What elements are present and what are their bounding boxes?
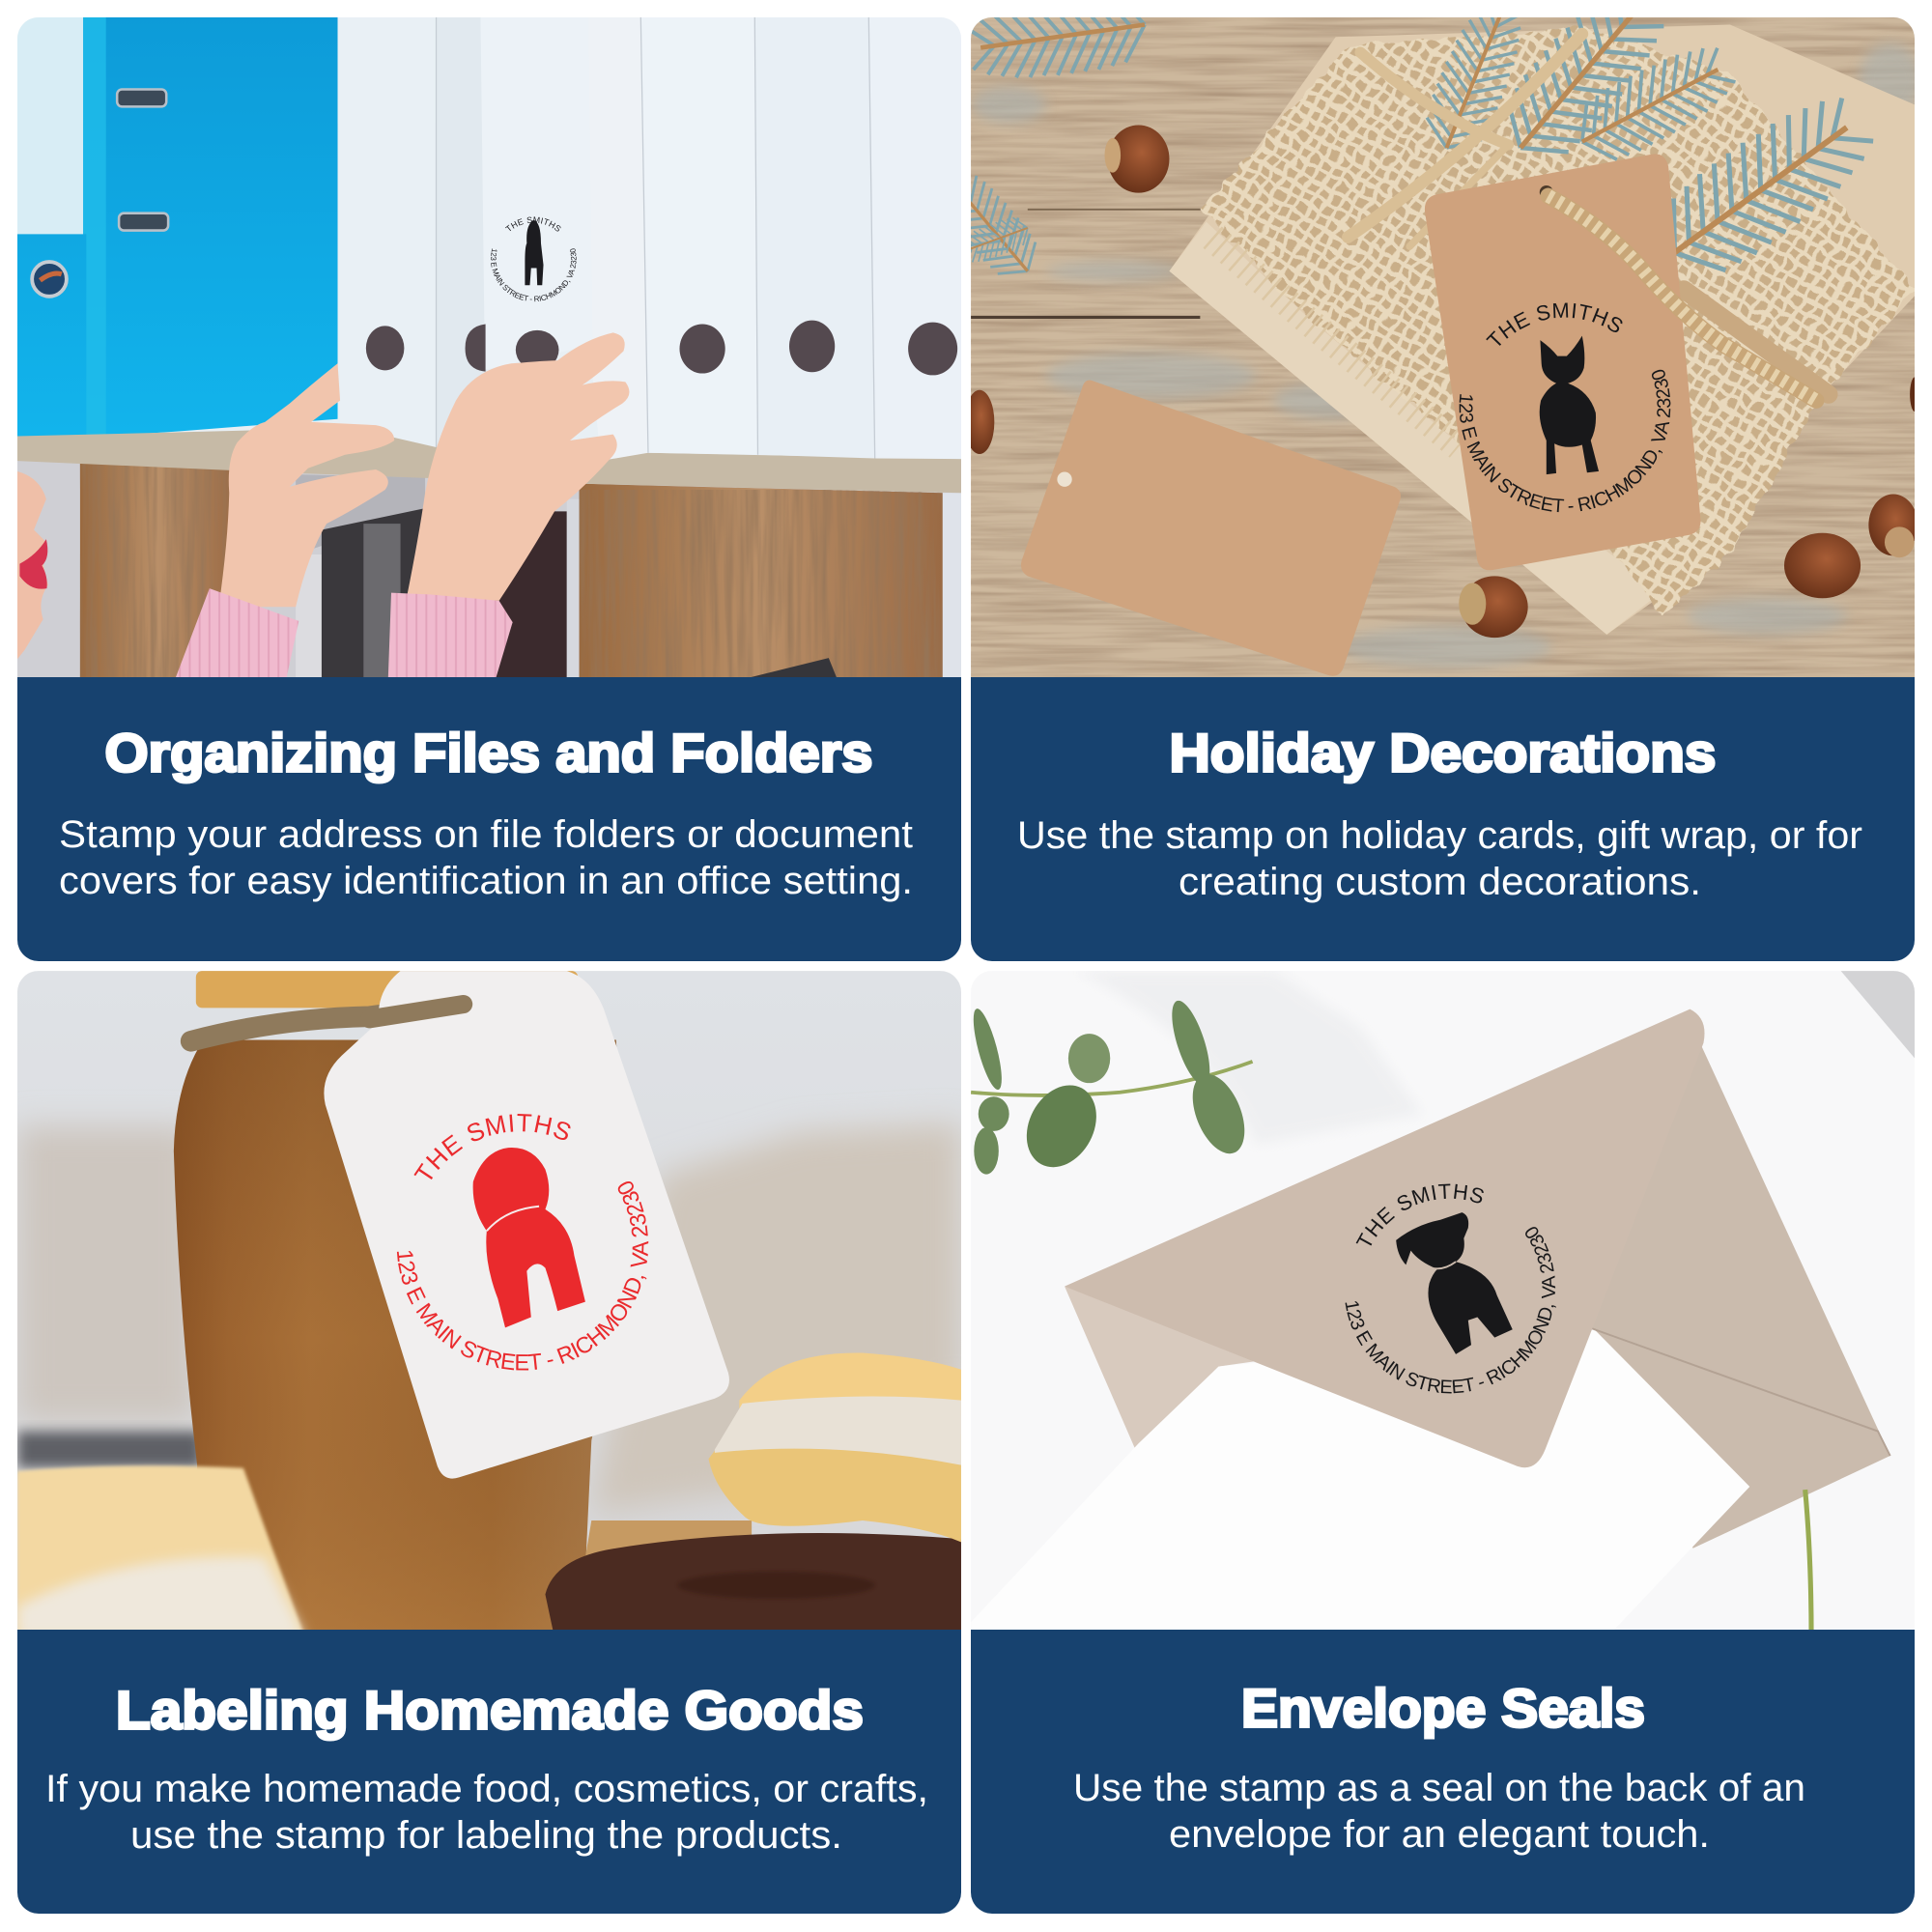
body text: creating custom decorations.: [1179, 861, 1701, 903]
cookie: right: [708, 1352, 961, 1542]
body text: envelope for an elegant touch.: [1169, 1813, 1710, 1856]
blurred cloth: [17, 1123, 961, 1515]
panel: labeling homemade goods: [17, 971, 961, 1914]
stamp: the smiths (hound): 123 E MAIN STREET - RICHMOND, VA 23230: [491, 248, 577, 301]
stamp: the smiths (french bulldog): [1459, 303, 1671, 512]
hazelnuts: [965, 125, 1919, 638]
white sheet: [971, 1329, 1749, 1637]
caption band: [17, 1630, 961, 1914]
chocolate cookie: [545, 1520, 961, 1637]
cookie: left: [17, 1465, 305, 1637]
heading: Envelope Seals: [1241, 1677, 1645, 1739]
envelope fold line: [1591, 1328, 1890, 1456]
fabric shadow: [1077, 971, 1422, 1145]
panel: envelope seals: [971, 971, 1915, 1914]
blank kraft tag: [1021, 380, 1401, 676]
stamp: the smiths (hound): THE SMITHS: [505, 216, 560, 232]
stamp: the smiths (hound): [491, 216, 577, 301]
photo: gift with kraft tags: [971, 17, 1915, 677]
jar: [174, 971, 629, 1637]
stamp: the smiths (bulldog): 123 E MAIN STREET - RICHMOND, VA 23230: [1345, 1227, 1556, 1393]
panel: organizing files and folders: [17, 17, 961, 961]
caption band: [971, 1630, 1915, 1914]
heading: Labeling Homemade Goods: [116, 1679, 864, 1741]
body text: Stamp your address on file folders or document: [59, 813, 913, 856]
envelope back: [1065, 1028, 1890, 1548]
wrapped present: [1169, 25, 1915, 635]
panel: holiday decorations: [971, 17, 1915, 961]
eucalyptus sprig: [968, 997, 1255, 1179]
binder: [17, 17, 338, 437]
stamp: the smiths (shaggy dog, red): THE SMITHS: [413, 1114, 570, 1179]
photo: jar with red stamped tag: [17, 971, 961, 1630]
body text: [1073, 1767, 1805, 1856]
body text: [45, 1768, 928, 1857]
caption band: [971, 677, 1915, 961]
photo: envelope with stamped flap: [971, 971, 1915, 1630]
twine: [1348, 34, 1829, 394]
caption band: [17, 677, 961, 961]
stamp: the smiths (french bulldog): THE SMITHS: [1486, 303, 1623, 346]
shelf: [17, 428, 961, 493]
body text: Use the stamp on holiday cards, gift wrap, or for: [1017, 814, 1862, 857]
body text: use the stamp for labeling the products.: [130, 1814, 842, 1857]
stamp: the smiths (bulldog): THE SMITHS: [1356, 1184, 1484, 1246]
white magazine files: [338, 17, 961, 461]
body text: covers for easy identification in an office setting.: [59, 860, 913, 902]
photo: files on a shelf: [17, 17, 961, 677]
pine sprigs: [926, 0, 1887, 292]
heading: Organizing Files and Folders: [104, 723, 873, 782]
body text: If you make homemade food, cosmetics, or crafts,: [45, 1768, 928, 1810]
body text: [1017, 814, 1862, 903]
stamp: the smiths (shaggy dog, red): 123 E MAIN STREET - RICHMOND, VA 23230: [396, 1181, 649, 1370]
body text: [59, 813, 913, 902]
stamped kraft tag: [1425, 154, 1816, 570]
green stem: [1805, 1490, 1811, 1637]
face: [17, 471, 48, 659]
stamped white tag: [324, 971, 729, 1479]
body text: Use the stamp as a seal on the back of an: [1073, 1767, 1805, 1809]
hands and sleeves: [176, 332, 629, 678]
stamp: the smiths (french bulldog): 123 E MAIN STREET - RICHMOND, VA 23230: [1459, 369, 1671, 512]
envelope flap: [1065, 1009, 1705, 1467]
heading: Holiday Decorations: [1169, 723, 1716, 782]
